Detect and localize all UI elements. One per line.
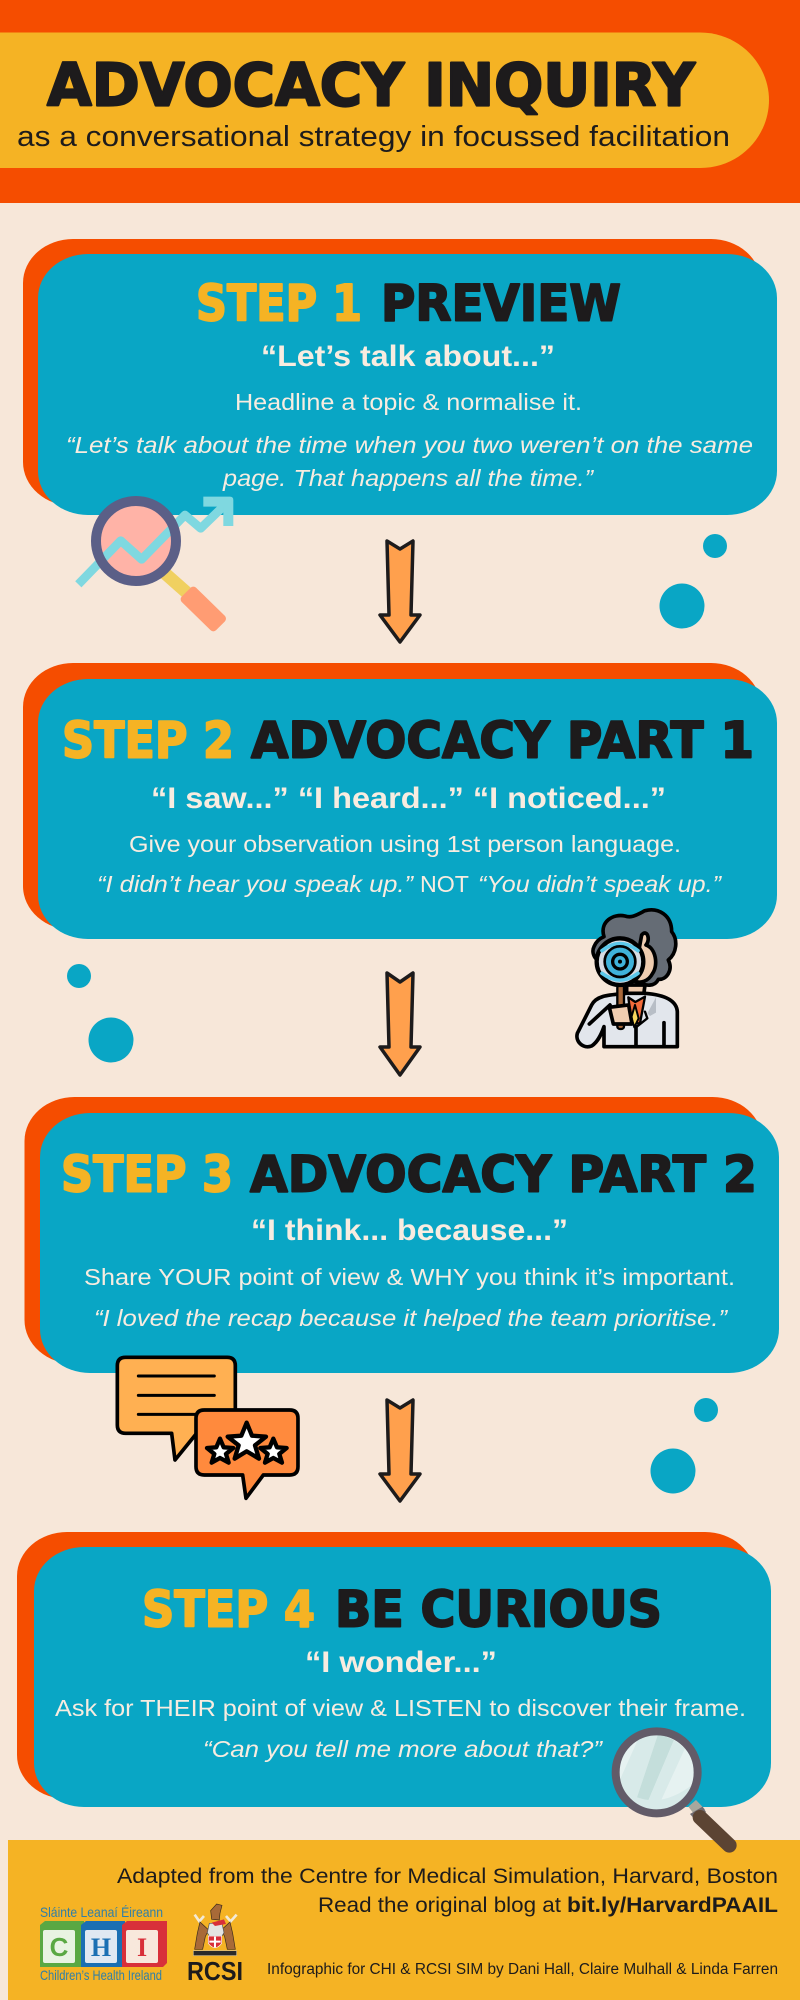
step 1 example: page. That happens all the time.” [222,465,594,491]
logo: CHI [40,1904,167,1983]
step 3 example: “I loved the recap because it helped the team prioritise.” [94,1305,728,1331]
panel: step 3 advocacy part 2 [24,1097,779,1373]
step 1 example [66,432,753,491]
step 1 phrase: “Let’s talk about...” [261,340,555,373]
step 3 phrase: “I think... because...” [251,1214,568,1247]
icon: large magnifying glass [616,1731,729,1845]
icon: person with magnifying glass [577,910,677,1047]
header pill [0,32,769,168]
step 2 heading: STEP 2 [62,712,234,770]
decorative dots 3 [650,1398,718,1494]
arrow: step 2 to step 3 [380,973,420,1075]
arrow: step 3 to step 4 [380,1400,420,1501]
step 2 example [97,871,722,897]
panel: step 1 preview [23,239,777,515]
authors line: Infographic for CHI & RCSI SIM by Dani Hall, Claire Mulhall & Linda Farren [267,1961,778,1978]
step 2 instruction: Give your observation using 1st person language. [129,831,681,857]
step 2 example: NOT [420,871,469,897]
logo: RCSI: RCSI [187,1956,243,1986]
subtitle: as a conversational strategy in focussed facilitation [17,121,730,153]
step 1 example: “Let’s talk about the time when you two weren’t on the same [66,432,753,458]
icon: speech bubbles with stars [117,1357,298,1498]
step 4 instruction: Ask for THEIR point of view & LISTEN to discover their frame. [55,1695,746,1721]
step 4 heading [142,1580,662,1638]
step 1 heading: PREVIEW [381,274,621,332]
panel: step 2 advocacy part 1 [23,663,777,939]
logo: CHI: Children’s Health Ireland [40,1967,162,1983]
credit line: Adapted from the Centre for Medical Simulation, Harvard, Boston [117,1865,778,1888]
step 4 heading: BE CURIOUS [335,1580,662,1638]
step 3 heading: STEP 3 [61,1146,233,1204]
step 4 example: “Can you tell me more about that?” [203,1736,603,1762]
step 1 instruction: Headline a topic & normalise it. [235,389,582,415]
decorative dots 1 [660,534,727,628]
icon: magnifier over rising chart [78,497,233,627]
footer band [8,1840,800,2000]
step 2 phrase: “I saw...” “I heard...” “I noticed...” [151,782,666,815]
header band [0,0,800,203]
logo: RCSI [187,1904,243,1986]
step 2 heading: ADVOCACY PART 1 [251,712,754,770]
title: ADVOCACY INQUIRY [47,50,696,120]
logo: CHI: Sláinte Leanaí Éireann [40,1904,163,1920]
blog link line [318,1894,778,1917]
step 1 heading [196,274,621,332]
panel: step 4 be curious [17,1532,771,1807]
step 2 example: “You didn’t speak up.” [478,871,722,897]
step 2 example: “I didn’t hear you speak up.” [97,871,414,897]
step 3 instruction: Share YOUR point of view & WHY you think it’s important. [84,1264,735,1290]
step 4 heading: STEP 4 [142,1580,315,1638]
arrow: step 1 to step 2 [380,541,420,642]
logo: CHI: H [91,1933,111,1962]
logo: CHI: I [137,1933,147,1962]
step 3 heading: ADVOCACY PART 2 [250,1146,757,1204]
blog link line: bit.ly/HarvardPAAIL [567,1894,778,1917]
step 1 heading: STEP 1 [196,274,362,332]
step 4 phrase: “I wonder...” [305,1646,497,1679]
decorative dots 2 [67,964,134,1062]
blog link line: Read the original blog at [318,1894,561,1917]
logo: CHI: C [50,1932,69,1962]
